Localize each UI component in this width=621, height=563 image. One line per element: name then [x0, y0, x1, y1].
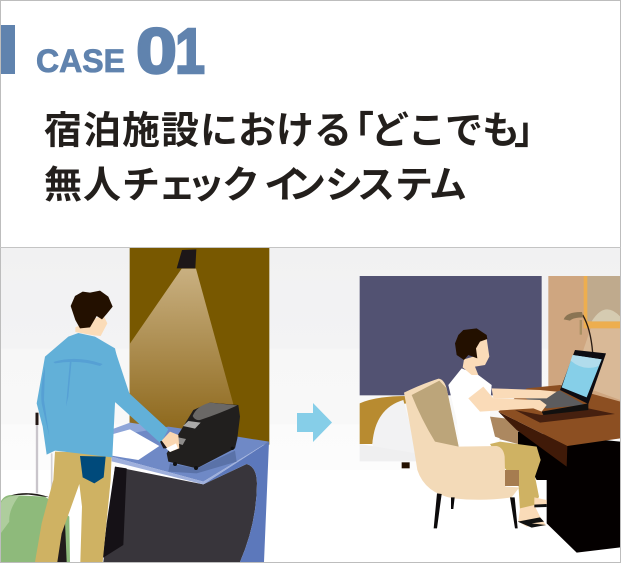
armchair	[404, 379, 519, 500]
laptop screen	[562, 355, 602, 397]
counter side	[203, 442, 269, 562]
desk front edge	[498, 412, 567, 467]
bed headboard	[360, 396, 407, 444]
desk side panel	[490, 417, 518, 444]
suitcase handle	[37, 413, 52, 497]
title: 無人チェックインシステム	[44, 165, 467, 207]
scene: guest at check-in kiosk	[0, 248, 269, 562]
bed foot	[402, 462, 410, 468]
counter edge	[112, 442, 269, 484]
neck and face	[463, 338, 489, 375]
title	[44, 110, 552, 207]
counter top	[112, 427, 269, 482]
desk base	[518, 432, 620, 553]
light beam	[130, 269, 237, 440]
suitcase	[0, 495, 70, 562]
case label: 1	[175, 15, 205, 87]
neck	[75, 315, 107, 336]
printer panel	[175, 437, 186, 445]
laptop	[523, 350, 606, 415]
foot	[518, 505, 546, 527]
case label	[36, 15, 205, 87]
thigh and leg	[490, 442, 541, 509]
arm	[115, 350, 168, 443]
picture	[584, 276, 620, 328]
suitcase highlight	[1, 495, 19, 533]
picture inner	[587, 276, 620, 321]
hair	[455, 328, 487, 360]
card in hand	[166, 443, 178, 452]
hair	[71, 291, 113, 328]
wristband	[160, 440, 170, 448]
torso	[448, 368, 500, 447]
shirt folds	[41, 359, 103, 437]
arrow	[297, 403, 332, 442]
laptop keyboard	[523, 391, 585, 408]
back arm	[492, 388, 557, 398]
sandal	[518, 517, 546, 528]
printer top dome	[193, 403, 237, 420]
laptop base	[542, 403, 588, 415]
shirt	[37, 333, 121, 457]
right wall	[548, 276, 620, 403]
printer feet	[173, 462, 177, 466]
desk mat	[515, 408, 615, 423]
heading accent bar	[0, 25, 15, 74]
counter base	[103, 464, 257, 562]
scene: guest working in room	[360, 276, 620, 553]
calf shadow	[505, 470, 519, 486]
kiosk printer	[167, 403, 240, 470]
case label: CASE	[36, 43, 125, 79]
paper on counter	[112, 429, 159, 460]
legs	[35, 452, 112, 562]
suitcase strap	[11, 493, 50, 497]
laptop screen glare	[571, 355, 602, 368]
chair legs	[434, 493, 518, 528]
back sandal	[534, 504, 547, 507]
back foot	[534, 497, 547, 505]
desk top	[498, 385, 620, 446]
divider	[0, 246, 621, 248]
wall niche	[130, 248, 269, 445]
illustration background	[1, 248, 620, 470]
hand	[162, 432, 179, 452]
counter back strip	[112, 423, 168, 440]
front arm	[468, 387, 547, 412]
bed pillows	[372, 400, 418, 457]
armchair back cushion	[412, 381, 459, 447]
suitcase wheel side	[57, 522, 67, 562]
lamp glow	[583, 328, 620, 400]
lamp	[564, 312, 593, 353]
ceiling lamp	[177, 249, 196, 268]
kiosk shadow	[168, 451, 237, 473]
back pocket	[80, 456, 106, 483]
title: 宿泊施設における「どこでも」	[44, 110, 552, 152]
counter shade	[103, 467, 127, 558]
wall panel	[360, 276, 542, 395]
printer label	[183, 421, 201, 429]
picture shape	[592, 309, 620, 321]
bed sheet	[360, 444, 420, 461]
case label: 0	[136, 15, 177, 87]
